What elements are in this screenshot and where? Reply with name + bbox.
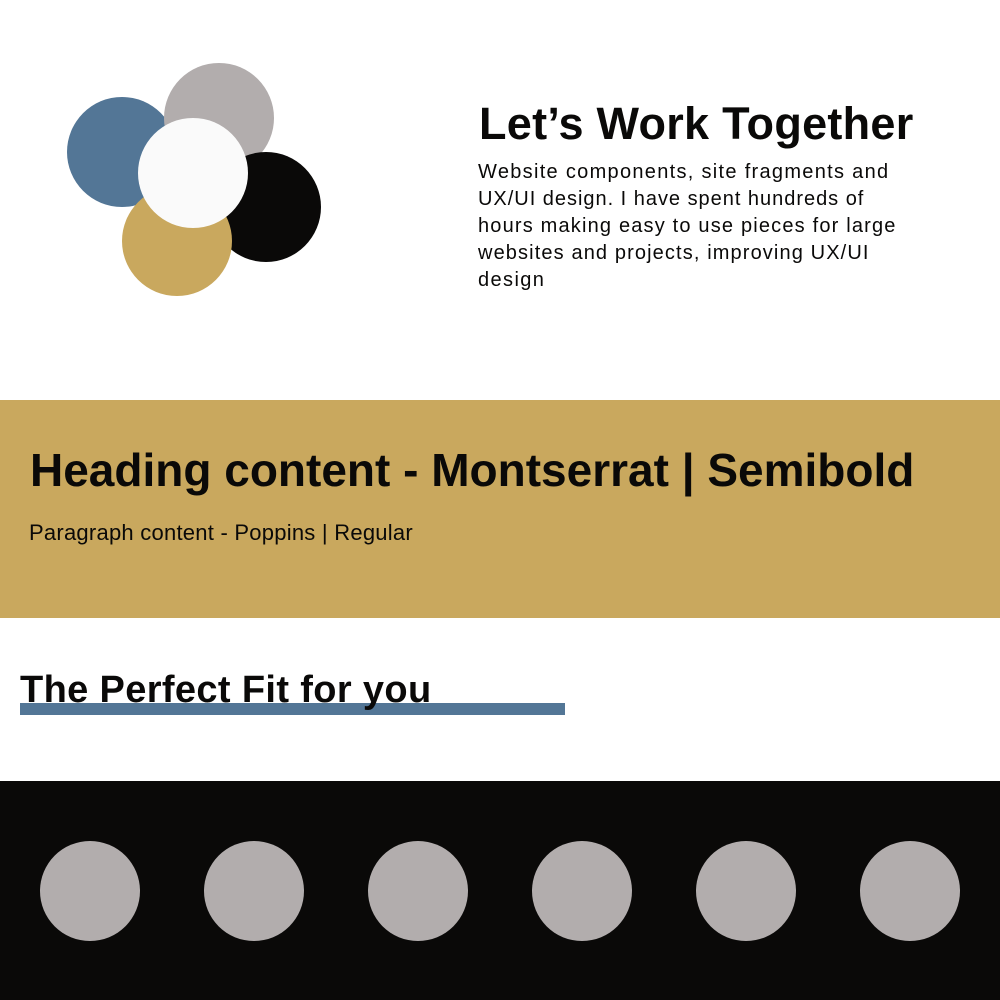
- paragraph sample: Paragraph content - Poppins | Regular: [29, 520, 413, 545]
- circle row: [40, 841, 960, 941]
- circle 3: [368, 841, 468, 941]
- circle 6: [860, 841, 960, 941]
- circle: blue: [67, 97, 177, 207]
- circle 1: [40, 841, 140, 941]
- circle: black: [211, 152, 321, 262]
- intro paragraph: hours making easy to use pieces for large: [478, 215, 897, 237]
- heading underline bar: [20, 703, 565, 715]
- title: Let’s Work Together: [479, 98, 914, 149]
- panel: gold typography band: [0, 400, 1000, 618]
- circle 4: [532, 841, 632, 941]
- intro paragraph: UX/UI design. I have spent hundreds of: [478, 188, 864, 210]
- circle: grey: [164, 63, 274, 173]
- intro paragraph: design: [478, 269, 545, 291]
- intro paragraph: websites and projects, improving UX/UI: [478, 242, 870, 264]
- intro paragraph: Website components, site fragments and: [478, 161, 889, 183]
- heading sample: Heading content - Montserrat | Semibold: [30, 444, 914, 496]
- section heading: The Perfect Fit for you: [20, 669, 432, 711]
- circle 5: [696, 841, 796, 941]
- circle: gold: [122, 186, 232, 296]
- panel: black footer band: [0, 781, 1000, 1000]
- circle: white: [138, 118, 248, 228]
- intro paragraph: [478, 161, 897, 291]
- logo: overlapping circles: [67, 63, 321, 296]
- circle 2: [204, 841, 304, 941]
